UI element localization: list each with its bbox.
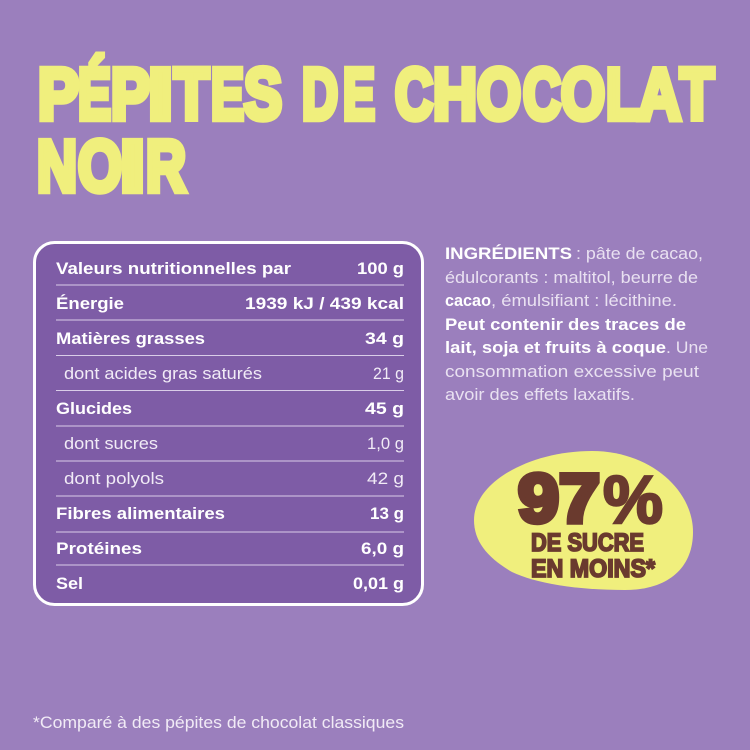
ingredients text block: , émulsifiant : lécithine. — [491, 292, 677, 310]
row: sugars: 1,0 g — [367, 434, 404, 453]
row: carbohydrates: 45 g — [365, 399, 404, 418]
badge: 97% less sugar — [474, 451, 693, 590]
title: L — [606, 55, 640, 135]
title: H — [433, 55, 477, 135]
title: D — [302, 55, 338, 135]
row: header: Valeurs nutritionnelles par — [56, 259, 291, 278]
row: fibre — [56, 504, 404, 523]
row: fat: 34 g — [365, 329, 404, 348]
row: carbohydrates — [56, 399, 404, 418]
badge: 97% less sugar: DE SUCRE — [531, 529, 644, 557]
ingredients text block: Peut contenir des traces de — [445, 316, 686, 334]
title: É — [78, 55, 111, 135]
ingredients text block: lait, soja et fruits à coque — [445, 339, 666, 357]
ingredients text block: . Une — [666, 339, 708, 357]
title: C — [523, 55, 561, 135]
footnote: *Comparé à des pépites de chocolat classiques — [33, 713, 404, 732]
title: O — [477, 55, 521, 135]
title: R — [146, 127, 186, 207]
row: saturates — [64, 364, 404, 383]
ingredients text block: consommation excessive peut — [445, 363, 699, 381]
row: sugars: dont sucres — [64, 434, 158, 453]
title: E — [343, 55, 375, 135]
row: polyols: 42 g — [367, 469, 404, 488]
row: salt: Sel — [56, 574, 83, 593]
ingredients text block — [445, 244, 708, 404]
row: saturates: dont acides gras saturés — [64, 364, 262, 383]
title: C — [395, 55, 433, 135]
title: O — [78, 127, 122, 207]
row: fibre: 13 g — [370, 504, 404, 523]
title: T — [680, 55, 714, 135]
badge: 97% less sugar: % — [603, 462, 663, 538]
badge: 97% less sugar: 97 — [518, 460, 600, 537]
ingredients text block: INGRÉDIENTS — [445, 244, 572, 263]
row: protein: 6,0 g — [361, 539, 404, 558]
row: fat: Matières grasses — [56, 329, 205, 348]
row: fibre: Fibres alimentaires — [56, 504, 225, 523]
row: energy: 1939 kJ / 439 kcal — [245, 294, 404, 313]
row: sugars — [64, 434, 404, 453]
row: protein — [56, 539, 404, 558]
title: P — [38, 55, 79, 135]
title: I — [148, 55, 173, 135]
ingredients text block: : pâte de cacao, — [576, 245, 703, 263]
title: S — [244, 55, 282, 135]
title: T — [174, 55, 209, 135]
row: saturates: 21 g — [373, 364, 404, 383]
row: header — [56, 259, 404, 278]
title: P — [111, 55, 150, 135]
title: N — [37, 127, 77, 207]
row: fat — [56, 329, 404, 348]
row: energy — [56, 294, 404, 313]
ingredients text block: cacao — [445, 292, 491, 310]
badge: 97% less sugar: EN MOINS* — [531, 555, 655, 583]
ingredients text block: avoir des effets laxatifs. — [445, 386, 635, 404]
ingredients text block: édulcorants : maltitol, beurre de — [445, 269, 698, 287]
row: header: 100 g — [357, 259, 404, 278]
title: A — [638, 55, 681, 135]
row: carbohydrates: Glucides — [56, 399, 132, 418]
title — [37, 55, 714, 207]
panel: nutrition table — [34, 242, 422, 604]
row: energy: Énergie — [56, 294, 124, 313]
row: polyols — [64, 469, 404, 488]
row: salt — [56, 574, 404, 593]
title: E — [211, 55, 244, 135]
title: I — [120, 127, 145, 207]
title: O — [561, 55, 605, 135]
row: salt: 0,01 g — [353, 574, 404, 593]
row: protein: Protéines — [56, 539, 142, 558]
row: polyols: dont polyols — [64, 469, 164, 488]
